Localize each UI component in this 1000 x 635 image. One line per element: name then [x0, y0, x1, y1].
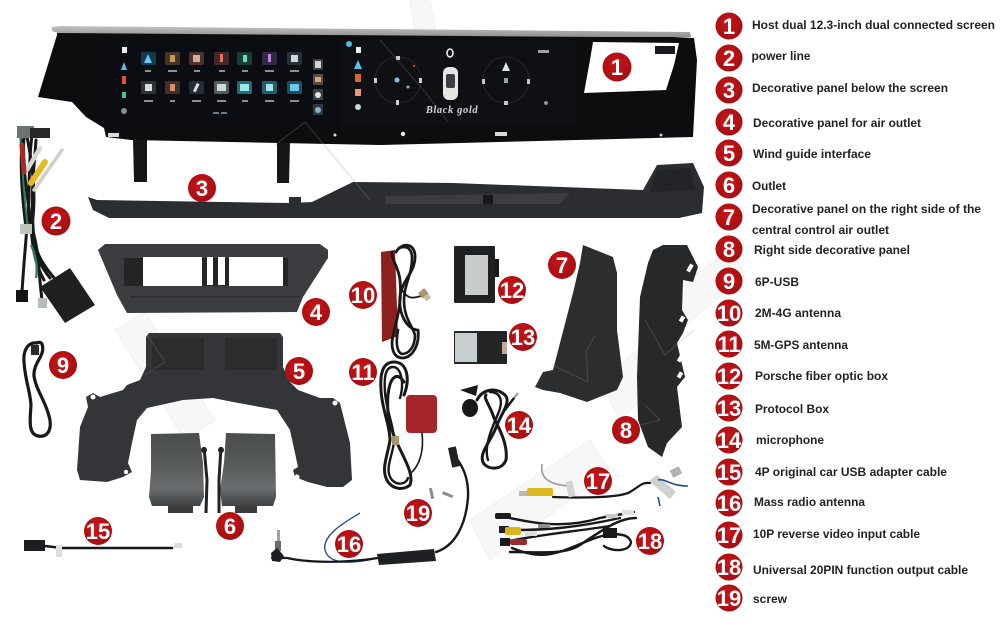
silver top strip	[52, 26, 691, 37]
legend item 6	[716, 172, 786, 198]
legend item 2	[716, 44, 810, 72]
legend item 1: 1	[723, 14, 735, 39]
legend item 7: central control air outlet	[752, 225, 889, 237]
legend item 2: power line	[752, 51, 810, 63]
legend item 18: Universal 20PIN function output cable	[753, 565, 968, 577]
part 18: 20PIN output cable	[495, 510, 636, 555]
part 2: power harness	[16, 126, 95, 323]
mounting prong right	[277, 143, 290, 183]
legend item 12: Porsche fiber optic box	[755, 371, 889, 383]
badge 16: 16	[337, 532, 361, 557]
badge 6	[216, 512, 244, 540]
part 8: right side panel	[637, 245, 698, 457]
legend list	[716, 12, 995, 612]
badge 4: 4	[310, 300, 323, 325]
badge 9: 9	[57, 353, 69, 378]
legend item 17: 10P reverse video input cable	[753, 529, 920, 541]
badge 11: 11	[351, 360, 375, 385]
right outlet	[218, 433, 276, 513]
legend item 7	[716, 204, 981, 237]
legend item 19: screw	[753, 594, 787, 606]
legend item 10: 10	[717, 301, 741, 326]
part 1: host dual screen	[38, 26, 697, 183]
connector white	[38, 298, 47, 308]
badge 5: 5	[293, 359, 305, 384]
legend item 9: 6P-USB	[755, 277, 799, 289]
left gauge	[374, 56, 422, 105]
right gauge	[482, 57, 548, 105]
legend item 2: 2	[723, 46, 735, 71]
part 17: reverse video cable	[519, 464, 688, 506]
legend item 17	[716, 522, 920, 548]
badge 14: 14	[507, 413, 532, 438]
badge 3	[188, 174, 216, 202]
part 14: microphone	[460, 385, 518, 468]
badge 5	[285, 357, 313, 385]
legend item 19: 19	[717, 586, 741, 611]
badge 17: 17	[586, 469, 610, 494]
part 12: fiber optic box	[454, 246, 499, 303]
legend item 6: Outlet	[752, 181, 786, 193]
screen	[106, 40, 575, 125]
legend item 12	[716, 362, 889, 390]
legend item 10	[716, 300, 842, 326]
legend item 13: Protocol Box	[755, 404, 830, 416]
legend item 15	[716, 458, 947, 486]
part 19: screws	[429, 488, 453, 499]
legend item 14: microphone	[756, 435, 824, 447]
badge 3: 3	[196, 176, 208, 201]
legend item 9	[716, 268, 799, 294]
badge 18: 18	[638, 529, 662, 554]
legend item 15: 15	[717, 460, 741, 485]
legend item 18: 18	[717, 555, 741, 580]
mounting prong left	[133, 139, 147, 182]
badge 7: 7	[556, 253, 568, 278]
part 16: radio antenna	[271, 446, 468, 565]
legend item 17: 17	[717, 523, 741, 548]
legend item 15: 4P original car USB adapter cable	[755, 467, 947, 479]
legend item 3: 3	[723, 78, 735, 103]
legend item 4: Decorative panel for air outlet	[753, 118, 921, 130]
legend item 5: Wind guide interface	[753, 149, 871, 161]
part 13: protocol box	[454, 331, 507, 364]
legend item 16	[716, 490, 866, 516]
part 4: air outlet decorative panel	[98, 244, 328, 313]
badge 13: 13	[511, 325, 535, 350]
badge 15: 15	[86, 519, 110, 544]
part 3: decorative panel below the screen	[88, 163, 704, 218]
badge 8	[612, 416, 640, 444]
legend item 14: 14	[717, 428, 742, 453]
legend item 5	[716, 140, 871, 166]
legend item 13: 13	[717, 396, 741, 421]
app tile grid	[141, 52, 302, 94]
right screen dock icons	[346, 41, 362, 110]
window cutout	[584, 42, 679, 93]
legend item 18	[716, 554, 968, 580]
part 7: right side of central air outlet panel	[535, 245, 623, 402]
badge 2	[42, 206, 70, 236]
legend item 16: Mass radio antenna	[754, 497, 866, 509]
badge 19: 19	[406, 501, 430, 526]
badge 7	[548, 251, 576, 279]
legend item 8	[716, 236, 910, 262]
car icon	[443, 67, 458, 100]
badge 10: 10	[351, 283, 375, 308]
legend item 1: Host dual 12.3-inch dual connected screen	[752, 20, 995, 32]
legend item 3: Decorative panel below the screen	[752, 83, 948, 95]
badge 2: 2	[50, 209, 62, 234]
legend item 4: 4	[723, 110, 736, 135]
module	[40, 268, 95, 323]
legend item 11: 11	[717, 332, 741, 357]
callout badges on the diagram	[42, 52, 664, 558]
part 5: wind guide	[77, 333, 352, 487]
legend item 10: 2M-4G antenna	[755, 308, 842, 320]
badge 4	[302, 298, 330, 326]
legend item 7: Decorative panel on the right side of the	[752, 204, 981, 216]
badge 1	[602, 52, 632, 82]
badge 12: 12	[500, 278, 524, 303]
part 9: 6P USB cable	[24, 342, 50, 436]
legend item 1	[716, 12, 995, 40]
legend item 13	[716, 394, 830, 422]
badge 9	[49, 351, 77, 379]
part 6: outlets	[149, 433, 276, 513]
legend item 19	[716, 584, 787, 612]
legend item 8: 8	[723, 237, 735, 262]
legend item 8: Right side decorative panel	[754, 245, 910, 257]
legend item 11	[716, 330, 849, 358]
legend item 9: 9	[723, 269, 735, 294]
legend item 11: 5M-GPS antenna	[754, 340, 849, 352]
badge 6: 6	[224, 514, 236, 539]
legend item 6: 6	[723, 173, 735, 198]
legend item 14	[716, 426, 824, 454]
legend item 3	[716, 76, 948, 104]
legend item 7: 7	[723, 205, 735, 230]
badge 1: 1	[611, 55, 623, 80]
left dock icons	[121, 47, 127, 114]
side column icons	[313, 59, 323, 115]
legend item 4	[716, 108, 921, 136]
part 11: GPS antenna	[381, 362, 437, 488]
legend item 5: 5	[723, 141, 735, 166]
legend item 12: 12	[717, 364, 741, 389]
tile captions	[144, 70, 299, 114]
speed readout	[447, 49, 453, 57]
part 15: USB adapter cable	[24, 540, 182, 557]
brand label: Black gold	[425, 105, 478, 116]
badge 8: 8	[620, 418, 632, 443]
legend item 16: 16	[717, 491, 741, 516]
connector black	[16, 290, 28, 302]
left outlet	[149, 433, 207, 513]
part 10: 4G antenna	[381, 245, 431, 358]
